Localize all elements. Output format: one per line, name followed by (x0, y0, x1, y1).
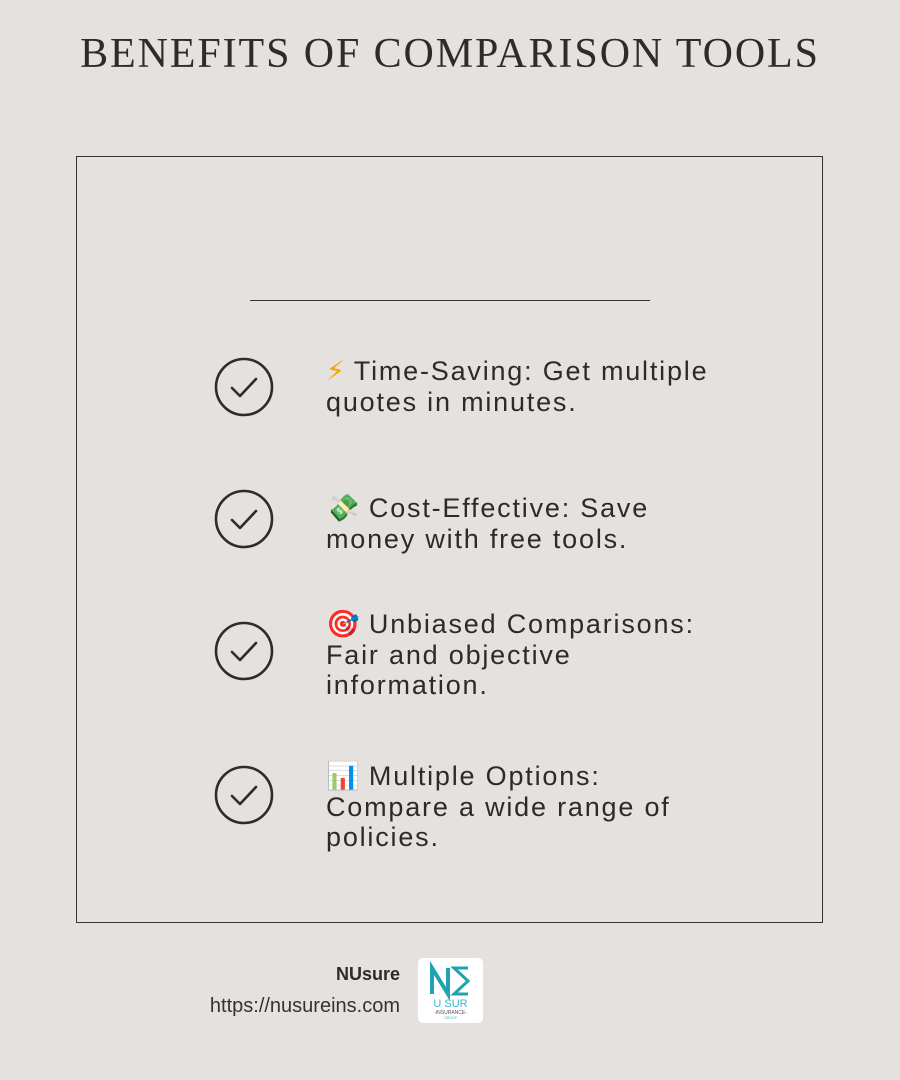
text: multiple options: Compare a wide range of (326, 792, 671, 822)
text: unbiased: 🎯 Unbiased Comparisons: (326, 609, 695, 640)
text: multiple options (326, 760, 671, 852)
logo: U SUR (433, 998, 468, 1010)
text: cost-effective: money with free tools. (326, 524, 628, 554)
text: unbiased: Fair and objective (326, 640, 572, 670)
icon: check 4 (214, 766, 274, 824)
title: BENEFITS OF COMPARISON TOOLS (80, 31, 820, 77)
logo: GROUP (444, 1016, 458, 1020)
text: unbiased (326, 609, 695, 700)
logo (418, 958, 483, 1023)
text: cost-effective: 💸 Cost-Effective: Save (326, 493, 649, 524)
footer: brand name: NUsure (336, 964, 400, 984)
text: multiple options: policies. (326, 822, 440, 852)
text: unbiased: information. (326, 670, 489, 700)
text: time-saving: quotes in minutes. (326, 387, 578, 417)
logo: -INSURANCE- (434, 1010, 467, 1016)
icon: check 1 (214, 358, 274, 416)
panel: benefits list (76, 156, 823, 923)
footer: url: https://nusureins.com (210, 995, 400, 1017)
text: time-saving: ⚡ Time-Saving: Get multiple (326, 356, 708, 387)
text: time-saving (326, 356, 708, 417)
text: cost-effective (326, 493, 649, 554)
icon: check 2 (214, 490, 274, 548)
text: multiple options: 📊 Multiple Options: (326, 761, 601, 792)
icon: check 3 (214, 622, 274, 680)
